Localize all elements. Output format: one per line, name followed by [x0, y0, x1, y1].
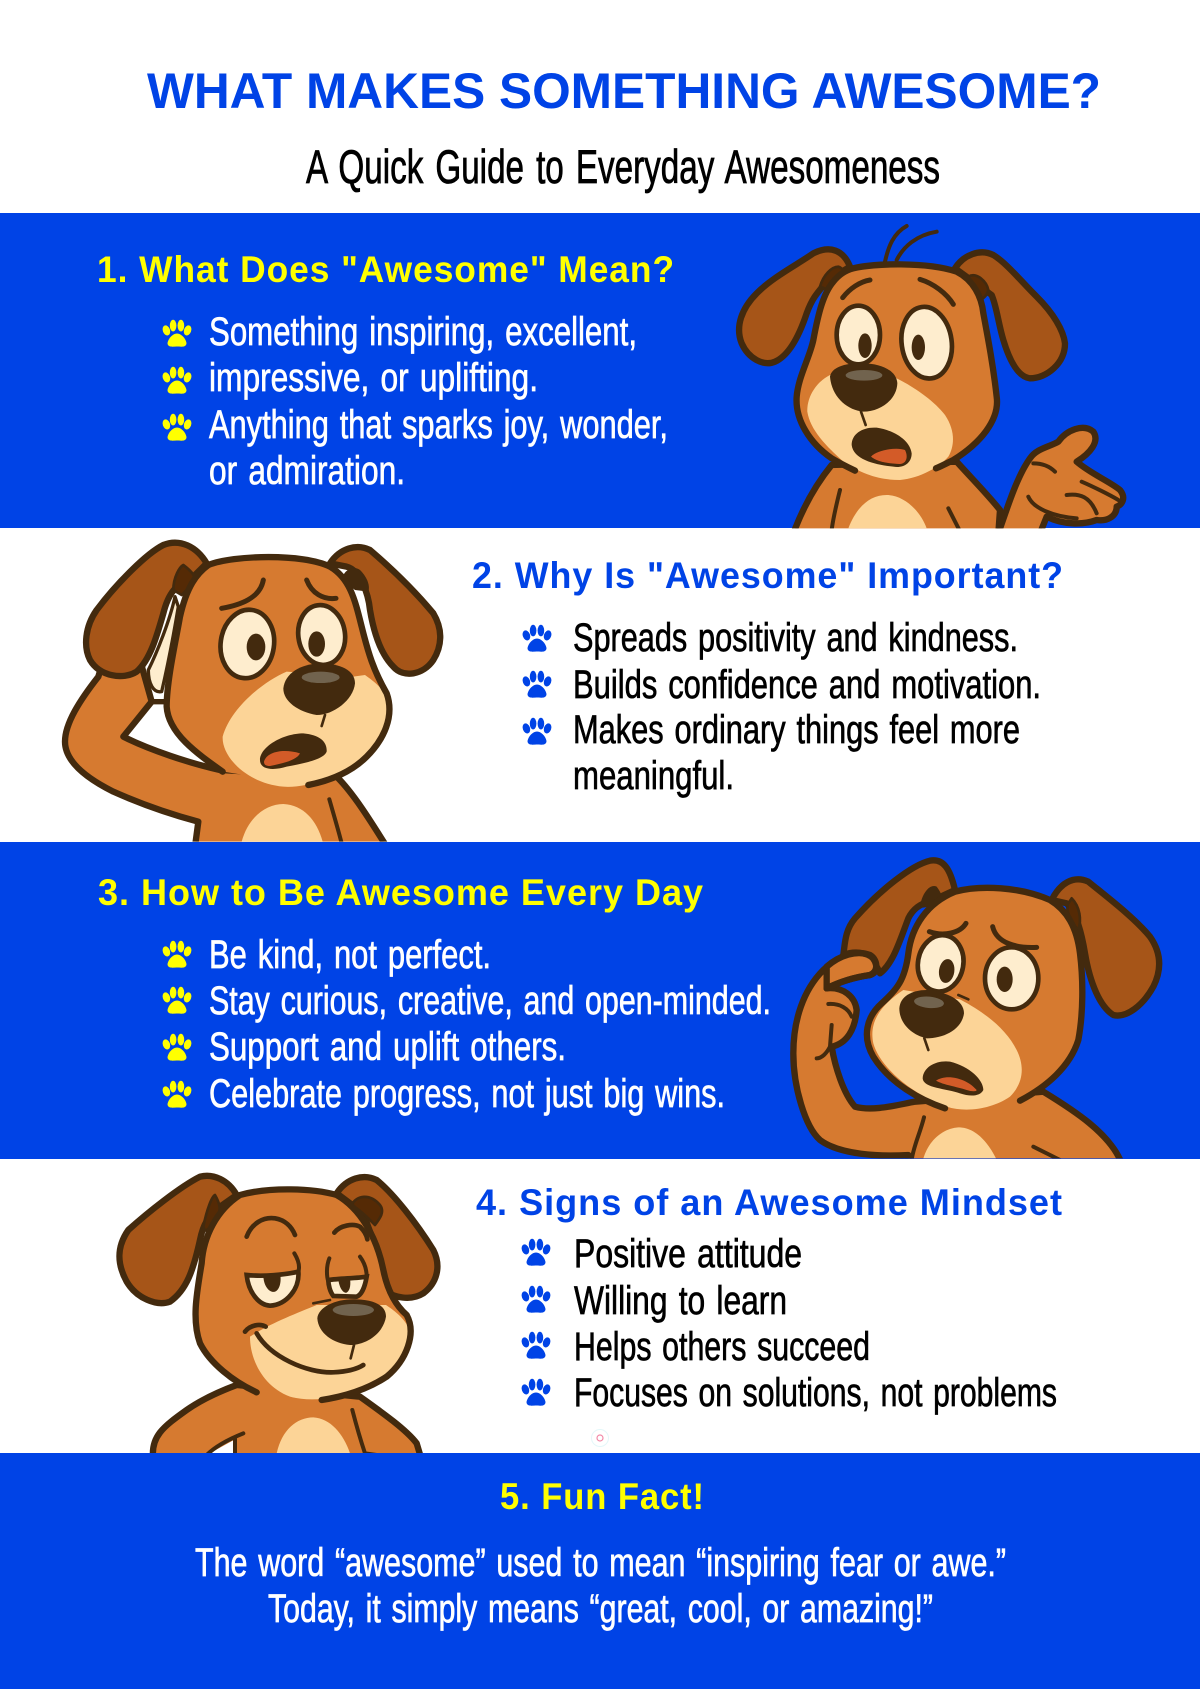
icon: small ring marker — [592, 1430, 608, 1446]
bullet list: section 3: Stay curious, creative, and open-minded. — [209, 979, 771, 1023]
heading: section 1: 1. What Does "Awesome" Mean? — [97, 249, 675, 290]
heading: section 3: 3. How to Be Awesome Every Day — [98, 872, 704, 913]
bullet list: section 4: Focuses on solutions, not problems — [574, 1371, 1057, 1415]
bullet list: section 2: meaningful. — [573, 754, 734, 798]
bullet list: section 3: Support and uplift others. — [209, 1025, 566, 1069]
illustration: worried dog scratching head — [65, 543, 440, 847]
heading: section 4: 4. Signs of an Awesome Mindset — [476, 1182, 1063, 1223]
bullet list: section 1: impressive, or uplifting. — [209, 356, 538, 400]
fun fact text — [195, 1541, 1006, 1631]
bullet list: section 1: Something inspiring, excellent, — [209, 310, 637, 354]
panel: why awesome is important — [65, 543, 1064, 847]
bullet list: section 1 — [161, 310, 668, 493]
illustration: puzzled dog tapping temple — [793, 860, 1159, 1165]
bullet list: section 4: Positive attitude — [574, 1232, 802, 1276]
panel: signs of an awesome mindset — [119, 1176, 1063, 1460]
panel: how to be awesome every day — [0, 842, 1200, 1165]
panel: fun fact — [0, 1453, 1200, 1689]
heading: section 5: 5. Fun Fact! — [500, 1476, 705, 1517]
bullet list: section 3 — [161, 933, 771, 1116]
bullet list: section 2: Spreads positivity and kindness. — [573, 616, 1018, 660]
title: WHAT MAKES SOMETHING AWESOME? — [147, 63, 1101, 119]
bullet list: section 2 — [521, 616, 1041, 798]
bullet list: section 2: Builds confidence and motivation. — [573, 663, 1041, 707]
heading: section 2: 2. Why Is "Awesome" Important? — [472, 555, 1064, 596]
bullet list: section 4 — [520, 1232, 1057, 1415]
bullet list: section 1: or admiration. — [209, 449, 405, 493]
bullet list: section 3: Celebrate progress, not just big wins. — [209, 1072, 725, 1116]
subtitle: A Quick Guide to Everyday Awesomeness — [306, 140, 940, 193]
bullet list: section 4: Helps others succeed — [574, 1325, 870, 1369]
bullet list: section 1: Anything that sparks joy, wonder, — [209, 403, 668, 447]
bullet list: section 2: Makes ordinary things feel more — [573, 708, 1020, 752]
bullet list: section 4: Willing to learn — [574, 1279, 787, 1323]
illustration: smug smiling dog — [119, 1176, 437, 1460]
illustration: surprised shrugging dog — [739, 226, 1123, 533]
panel: what does awesome mean — [0, 213, 1200, 533]
bullet list: section 3: Be kind, not perfect. — [209, 933, 491, 977]
fun fact text: Today, it simply means “great, cool, or amazing!” — [268, 1587, 933, 1631]
